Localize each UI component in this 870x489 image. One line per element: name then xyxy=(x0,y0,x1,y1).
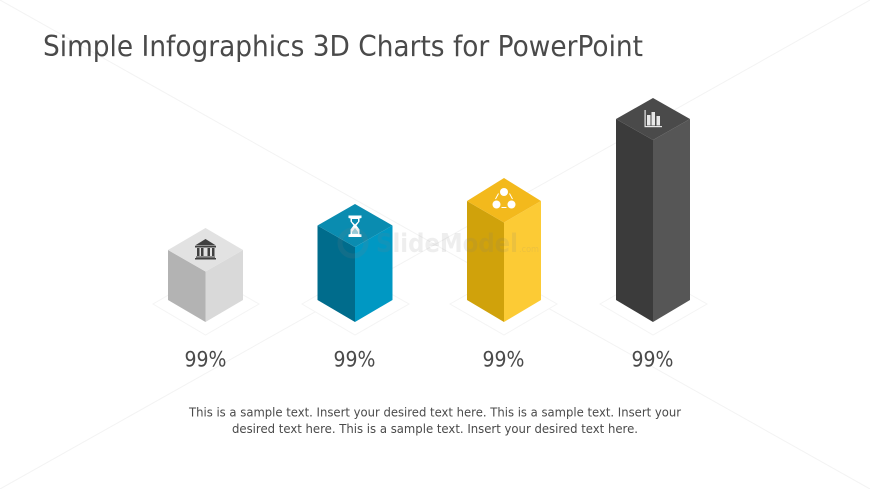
floor diamond xyxy=(153,274,259,335)
floor diamond xyxy=(600,274,707,335)
watermark: .com xyxy=(519,245,539,255)
left face xyxy=(168,250,206,322)
top face xyxy=(467,178,541,222)
column 1: light gray cube xyxy=(153,228,259,335)
body text: desired text here. This is a sample text. Insert your desired text here. xyxy=(232,422,638,437)
right face xyxy=(504,201,541,322)
left face xyxy=(467,201,504,322)
watermark: SlideModel xyxy=(376,229,518,259)
icon: bar chart xyxy=(644,110,662,127)
icon: hourglass xyxy=(348,216,362,237)
floor diamond xyxy=(302,274,409,335)
right face xyxy=(653,119,690,322)
body text: This is a sample text. Insert your desired text here. This is a sample text. Insert your xyxy=(188,406,682,420)
icon: cycle of three circles xyxy=(492,188,516,208)
value 1: 99% xyxy=(184,348,226,372)
column 4: dark bar xyxy=(600,98,707,335)
right face xyxy=(355,226,392,322)
top face xyxy=(616,98,690,140)
left face xyxy=(318,226,355,322)
percentage labels xyxy=(184,348,674,372)
value 2: 99% xyxy=(334,348,376,372)
body text xyxy=(188,406,682,437)
title: Simple Infographics 3D Charts for PowerPoint xyxy=(43,30,643,63)
column 3: yellow bar xyxy=(450,178,557,335)
icon: bank xyxy=(195,239,216,260)
floor diamond xyxy=(450,274,557,335)
column 2: blue bar xyxy=(302,204,409,335)
value 4: 99% xyxy=(632,348,674,372)
right face xyxy=(206,250,243,322)
top face xyxy=(318,204,392,247)
top face xyxy=(168,228,243,272)
value 3: 99% xyxy=(482,348,524,372)
left face xyxy=(616,119,653,322)
